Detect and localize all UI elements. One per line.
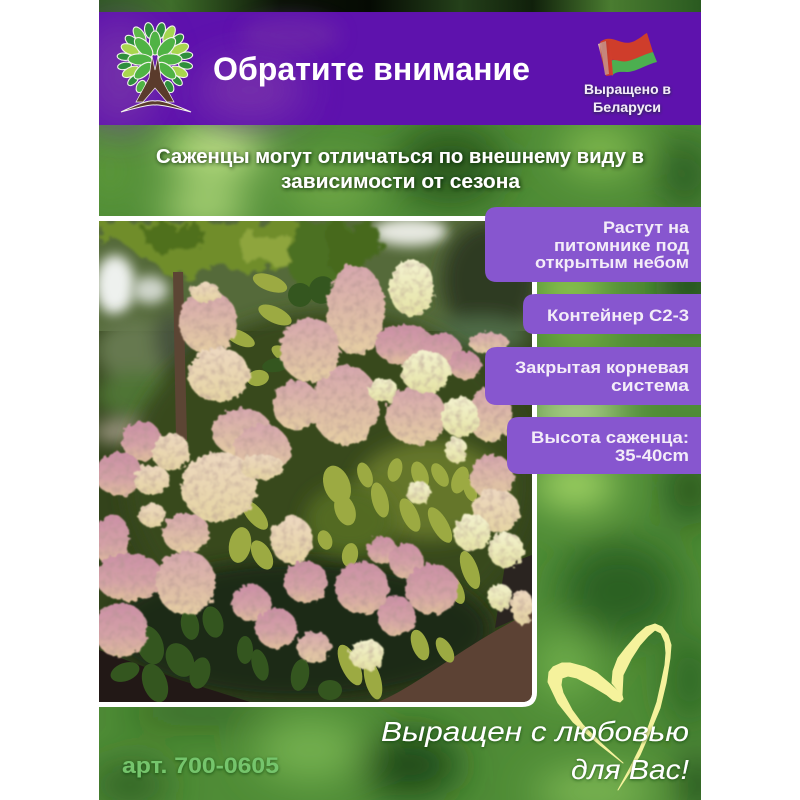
flag caption [584, 82, 671, 115]
trunk [173, 272, 187, 440]
subtitle: зависимости от сезона [281, 171, 521, 193]
flower clusters [94, 260, 533, 670]
leaves [223, 269, 484, 701]
flag caption: Выращено в [584, 82, 671, 97]
top strip [99, 0, 701, 12]
flag caption: Беларуси [593, 100, 661, 115]
sky and far trees [92, 218, 538, 442]
ground arcs [121, 101, 191, 112]
icon: Belarus flag [598, 33, 657, 76]
article number: арт. 700-0605 [122, 753, 279, 778]
label: seedling height: 35-40cm [615, 446, 689, 465]
background: green bokeh [90, 0, 716, 800]
label: container [523, 294, 701, 334]
subtitle [156, 146, 644, 193]
icon: heart [548, 624, 671, 790]
label: grown outdoors: Растут на [603, 218, 690, 237]
slogan: Выращен с любовью [381, 716, 689, 747]
slogan [381, 716, 689, 785]
icon: tree logo [117, 22, 193, 112]
label: seedling height [507, 417, 701, 474]
tree crown leaves [117, 22, 193, 94]
tree trunk [136, 56, 174, 102]
label: closed root system: Закрытая корневая [515, 358, 689, 377]
label: grown outdoors: питомнике под [554, 236, 689, 255]
photo frame [99, 216, 537, 707]
subtitle: Саженцы могут отличаться по внешнему виду в [156, 146, 644, 168]
label: container: Контейнер С2-3 [547, 306, 689, 325]
label: grown outdoors: открытым небом [535, 253, 689, 272]
label: seedling height: Высота саженца: [531, 428, 689, 447]
label: closed root system: система [611, 376, 690, 395]
header band [80, 12, 701, 130]
title: Обратите внимание [213, 51, 530, 87]
photo: hydrangea bush [92, 218, 538, 706]
bush foliage [99, 310, 535, 702]
label: closed root system [485, 347, 701, 405]
panel: growing conditions [485, 207, 701, 474]
slogan: для Вас! [571, 754, 689, 785]
label: grown outdoors [485, 207, 701, 282]
canopy [99, 221, 385, 295]
